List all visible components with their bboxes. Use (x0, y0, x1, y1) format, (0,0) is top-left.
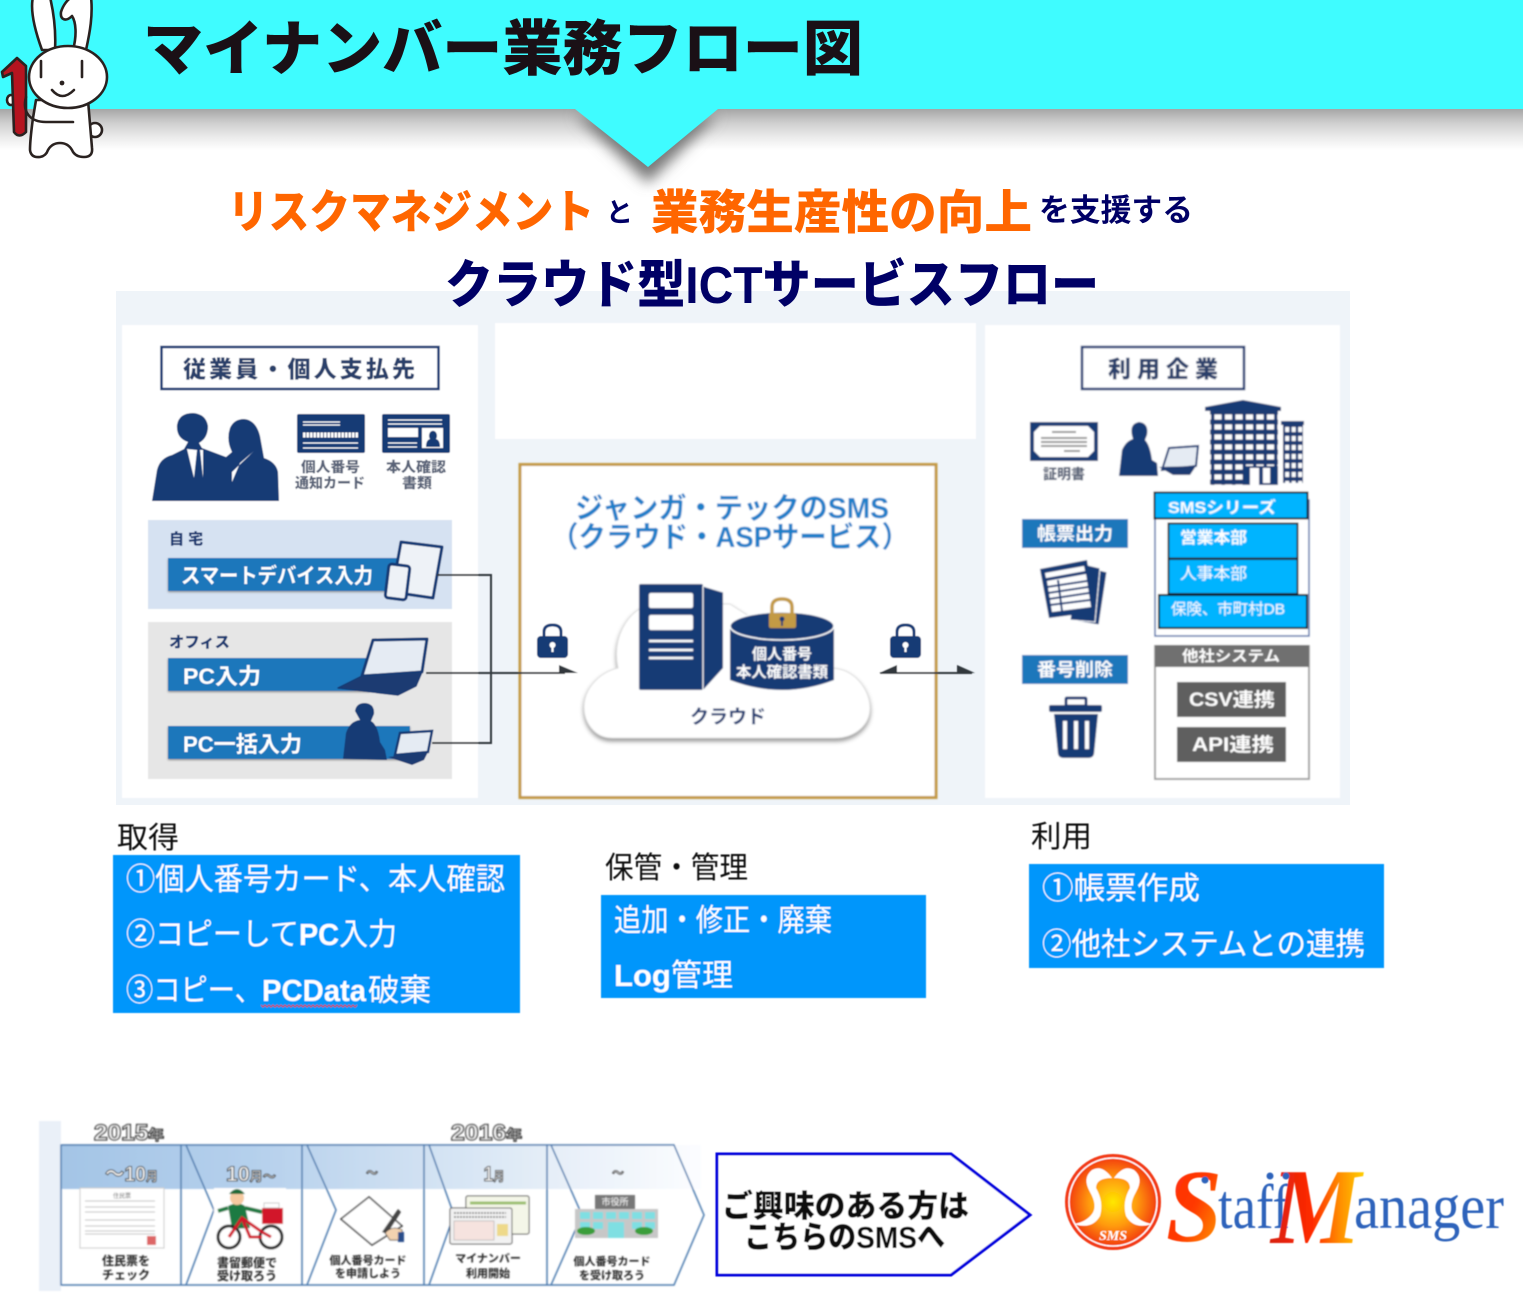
callout arrow: contact SMS: ご興味のある方は (722, 1189, 969, 1224)
icon: right padlock (890, 625, 921, 658)
section: acquisition: ①個人番号カード、本人確認 (126, 862, 505, 897)
captions: 受け取ろう (217, 1268, 277, 1283)
icon: residence certificate (80, 1188, 164, 1248)
section: usage: ①帳票作成 (1042, 871, 1200, 906)
icon: cloud (584, 604, 870, 738)
arrow: two-way link (879, 665, 975, 673)
subtitle line: リスクマネジメント (228, 186, 594, 238)
icon: application form and pen (341, 1197, 404, 1245)
icon: identity document (382, 414, 450, 453)
panel: SMS series: 保険、市町村DB (1171, 601, 1285, 618)
panel: SMS series (1154, 492, 1309, 636)
callout arrow: contact SMS: こちらのSMSへ (744, 1220, 945, 1255)
month labels: ～ (366, 1166, 378, 1180)
label: certificate: 証明書 (1043, 466, 1085, 482)
heading: Janga Tech SMS (551, 492, 909, 554)
title: マイナンバー業務フロー図 (143, 16, 863, 83)
logo: SMS emblem: SMS (1099, 1229, 1127, 1244)
captions: 個人番号カード (574, 1255, 650, 1268)
icon: forms stack (1040, 560, 1107, 625)
month labels (105, 1163, 624, 1186)
section: storage and management: 追加・修正・廃棄 (614, 903, 832, 938)
header banner (0, 0, 1523, 183)
panel: user companies (985, 325, 1340, 798)
captions: チェック (102, 1268, 150, 1282)
icon: person at laptop (1119, 422, 1198, 476)
heading: employees: 従業員・個人支払先 (183, 356, 415, 382)
captions: 住民票を (102, 1253, 150, 1268)
section: acquisition: ③コピー、 (126, 973, 262, 1008)
captions (102, 1252, 650, 1283)
captions: を申請しよう (335, 1266, 401, 1280)
label: identity document (386, 459, 446, 491)
icon: notification card (297, 414, 365, 453)
panel: other systems: API連携 (1192, 734, 1274, 756)
section: acquisition: 破棄 (368, 973, 431, 1008)
year labels (94, 1120, 522, 1145)
label: identity document: 書類 (402, 475, 432, 491)
icon: city office building: 市役所 (601, 1196, 629, 1207)
panel: office: PC一括入力 (183, 732, 302, 757)
month labels: ～ (612, 1166, 624, 1180)
year labels: 2015 年 (94, 1120, 164, 1145)
logo: StaffManager wordmark: anager (1354, 1171, 1504, 1242)
icon: left padlock (537, 625, 568, 658)
month labels: ～10月 (105, 1163, 158, 1186)
panel: office: PC入力 (183, 664, 261, 689)
logo: SMS emblem (1065, 1154, 1161, 1250)
subtitle line: を支援する (1039, 193, 1193, 228)
section: acquisition: PCData (262, 973, 367, 1008)
logo: StaffManager wordmark: M (1269, 1148, 1365, 1267)
label bar: number deletion (1022, 655, 1128, 684)
label: notification card: 通知カード (295, 475, 365, 491)
panel: cloud service box (520, 464, 936, 798)
panel: upper centre blank (495, 323, 976, 439)
icon: secure database: 本人確認書類 (736, 663, 828, 681)
panel: SMS series: 営業本部 (1180, 528, 1247, 547)
icon: trash can (1049, 698, 1102, 758)
panel: SMS series: 人事本部 (1180, 565, 1247, 583)
year labels: 2016 年 (451, 1120, 522, 1145)
label: notification card: 個人番号 (301, 459, 360, 475)
panel: home: スマートデバイス入力 (181, 564, 373, 588)
label: notification card (295, 459, 365, 491)
heading: Janga Tech SMS: （クラウド・ASPサービス） (551, 521, 909, 554)
section: acquisition: 取得 (117, 822, 179, 855)
panel: home (148, 520, 452, 609)
captions: マイナンバー (455, 1252, 521, 1265)
icon: city office building (575, 1195, 658, 1238)
subtitle line: と (606, 198, 633, 228)
section: acquisition: ②コピーしてPC入力 (126, 917, 397, 952)
month labels: 1月 (484, 1163, 504, 1186)
section: storage and management: Log管理 (614, 958, 733, 993)
captions: 書留郵便で (217, 1255, 277, 1270)
heading: user companies: 利用企業 (1108, 356, 1218, 382)
panel: other systems: 他社システム (1182, 648, 1280, 665)
captions: を受け取ろう (579, 1268, 645, 1282)
panel: office: オフィス (169, 634, 230, 651)
panel: home: 自 宅 (169, 530, 203, 548)
month labels: 10月～ (226, 1163, 276, 1186)
icon: my number cards (450, 1196, 529, 1244)
label: identity document: 本人確認 (386, 459, 446, 475)
logo: StaffManager wordmark: taff (1218, 1171, 1291, 1242)
section: usage (1029, 821, 1384, 968)
section: usage: 利用 (1031, 821, 1092, 854)
callout arrow: contact SMS (717, 1154, 1030, 1275)
icon: laptop (338, 639, 427, 695)
panel: other systems: CSV連携 (1189, 689, 1275, 711)
label bar: number deletion: 番号削除 (1037, 660, 1113, 680)
section: storage and management (601, 852, 926, 998)
section: usage: ②他社システムとの連携 (1042, 927, 1365, 962)
icon: two business people (152, 413, 279, 501)
subtitle line: 業務生産性の向上 (651, 186, 1032, 239)
heading: Janga Tech SMS: ジャンガ・テックのSMS (575, 492, 889, 525)
icon: server (639, 584, 723, 690)
label: cloud: クラウド (690, 706, 766, 728)
icon: mail carrier on bicycle (214, 1188, 286, 1250)
icon: office building (1205, 400, 1304, 485)
icon: residence certificate: 住民票 (113, 1192, 131, 1200)
background panel: service flow (116, 291, 1350, 805)
timeline: my number schedule (39, 1120, 704, 1291)
connector lines from inputs (432, 575, 491, 743)
captions: 個人番号カード (330, 1254, 406, 1267)
mascot: rabbit holding number one (2, 0, 107, 157)
subtitle line (228, 186, 1193, 239)
label bar: form output (1022, 519, 1128, 548)
heading: user companies (1082, 347, 1244, 389)
heading: cloud ICT service flow: クラウド型ICTサービスフロー (445, 256, 1099, 315)
icon: secure database: 個人番号 (752, 646, 812, 663)
captions: 利用開始 (466, 1266, 510, 1280)
arrow: to cloud (426, 665, 578, 673)
panel: employees and payees (39, 323, 1504, 1291)
logo: StaffManager wordmark: S (1166, 1149, 1222, 1264)
panel: office (148, 622, 452, 779)
icon: certificate (1030, 422, 1098, 461)
icon: secure database (730, 599, 834, 690)
heading: employees (162, 347, 438, 389)
panel: SMS series: SMSシリーズ (1168, 498, 1276, 517)
logo: StaffManager wordmark (1166, 1148, 1504, 1267)
section: acquisition (113, 822, 520, 1013)
icon: person at laptop (343, 703, 432, 765)
panel: other systems (1155, 645, 1309, 779)
section: storage and management: 保管・管理 (605, 852, 748, 885)
icon: tablet and phone (385, 542, 442, 600)
label bar: form output: 帳票出力 (1037, 524, 1113, 544)
